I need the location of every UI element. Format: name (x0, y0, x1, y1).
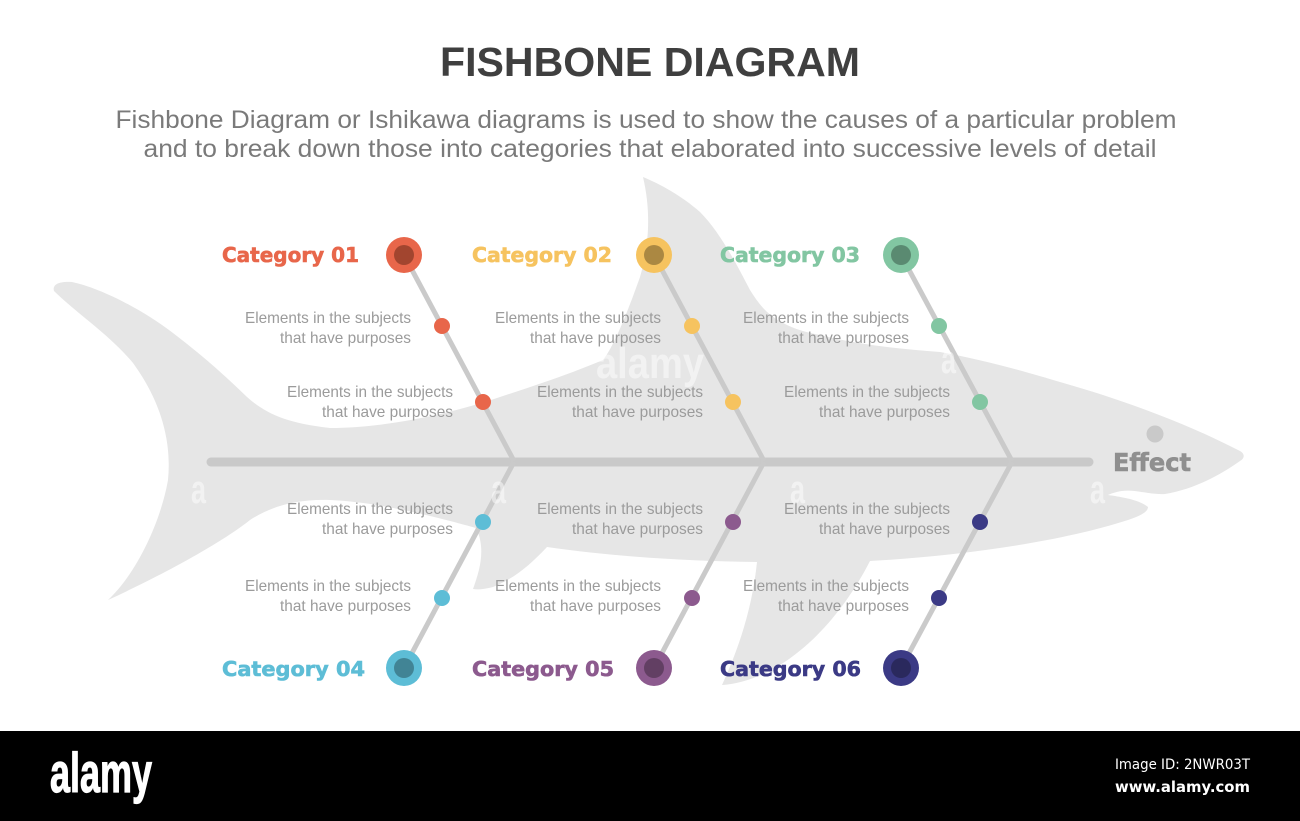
branch: category 01: that have purposes (322, 404, 453, 421)
subtitle text block: and to break down those into categories that elaborated into successive levels of detail (144, 135, 1156, 163)
branch: category 06: that have purposes (778, 598, 909, 615)
branch: category 01: Elements in the subjects (287, 384, 453, 401)
branch: category 01: that have purposes (280, 330, 411, 347)
title: FISHBONE DIAGRAM (440, 39, 860, 85)
watermark overlay: a (790, 468, 806, 512)
branch: category 01: Elements in the subjects (245, 310, 411, 327)
watermark overlay (191, 338, 1106, 512)
branch: category 05: Category 05 (472, 657, 614, 681)
branch: category 04: that have purposes (280, 598, 411, 615)
footer url: www.alamy.com (1115, 778, 1250, 796)
watermark overlay: alamy (596, 339, 704, 388)
branch: category 05 (472, 462, 764, 686)
watermark overlay: a (491, 468, 507, 512)
branch: category 02 (472, 237, 764, 461)
footer logo: alamy (50, 741, 152, 804)
branch: category 03: that have purposes (819, 404, 950, 421)
branch: category 04 (222, 462, 514, 686)
branch: category 06: Elements in the subjects (784, 501, 950, 518)
image id: Image ID: 2NWR03T (1115, 757, 1250, 773)
shark eye (1146, 426, 1164, 442)
watermark overlay: a (191, 468, 207, 512)
branch: category 05: that have purposes (572, 521, 703, 538)
branch: category 06: that have purposes (819, 521, 950, 538)
branch: category 02: Elements in the subjects (537, 384, 703, 401)
footer bar (0, 731, 1300, 821)
watermark overlay: a (941, 338, 957, 382)
branch: category 06 (720, 462, 1012, 686)
branch: category 03 (720, 237, 1012, 461)
branch: category 02: that have purposes (530, 330, 661, 347)
branch: category 02: Category 02 (472, 243, 612, 267)
branch: category 01 (222, 237, 514, 461)
branch: category 04: Category 04 (222, 657, 365, 681)
branch: category 05: that have purposes (530, 598, 661, 615)
subtitle text block: Fishbone Diagram or Ishikawa diagrams is used to show the causes of a particular problem (116, 106, 1176, 134)
branch: category 02: Elements in the subjects (495, 310, 661, 327)
branch: category 04: Elements in the subjects (287, 501, 453, 518)
branch: category 06: Elements in the subjects (743, 578, 909, 595)
shark silhouette background (54, 177, 1244, 685)
branch: category 05: Elements in the subjects (495, 578, 661, 595)
branch: category 01: Category 01 (222, 243, 359, 267)
subtitle text block (116, 106, 1176, 163)
fish spine (211, 458, 1089, 466)
branch: category 02: that have purposes (572, 404, 703, 421)
branch: category 03: Elements in the subjects (784, 384, 950, 401)
effect label: Effect (1113, 448, 1191, 477)
watermark overlay: a (1090, 468, 1106, 512)
branch: category 03: Category 03 (720, 243, 860, 267)
branch: category 03: Elements in the subjects (743, 310, 909, 327)
branch: category 03: that have purposes (778, 330, 909, 347)
branch: category 05: Elements in the subjects (537, 501, 703, 518)
branch: category 04: that have purposes (322, 521, 453, 538)
branch: category 04: Elements in the subjects (245, 578, 411, 595)
branch: category 06: Category 06 (720, 657, 861, 681)
